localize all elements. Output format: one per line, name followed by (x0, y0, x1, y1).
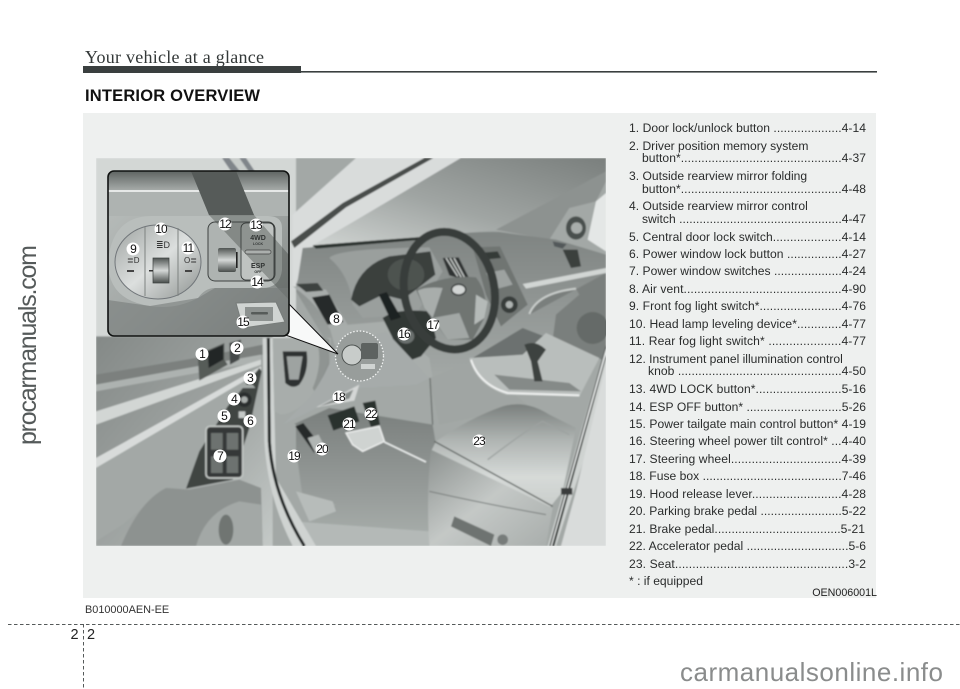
parts list: 9. Front fog light switch*........................4-76 (629, 299, 866, 313)
number callouts: 14 (251, 275, 264, 289)
number callouts: 2 (234, 341, 241, 355)
4WD LOCK and ESP OFF labels (250, 235, 266, 274)
center stack (473, 246, 528, 326)
column shroud (383, 310, 436, 366)
parts list: 15. Power tailgate main control button* 4-19 (629, 417, 866, 431)
number callouts: 7 (217, 449, 224, 463)
parts list: 2. Driver position memory system (629, 139, 808, 153)
dashboard (296, 232, 606, 345)
door handle recess (198, 343, 228, 381)
4WD LOCK and ESP OFF labels: 4WD (250, 235, 266, 242)
page numbers: 2 (87, 627, 95, 643)
inset: switch panel detail: ≣D (156, 240, 171, 250)
parts list: 5. Central door lock switch....................4-14 (629, 230, 866, 244)
header title: Your vehicle at a glance (85, 47, 264, 67)
watermark: procarmanuals.com: procarmanuals.com (14, 245, 42, 445)
inset: switch panel detail: ≣D (127, 256, 140, 265)
windshield (313, 158, 606, 245)
console (469, 333, 599, 396)
number callouts: 17 (427, 318, 440, 332)
armrest (121, 480, 263, 546)
window frame (293, 158, 461, 291)
parts list: 4. Outside rearview mirror control (629, 199, 808, 213)
number callouts: 13 (250, 218, 263, 232)
parts list: 1. Door lock/unlock button ....................4-14 (629, 121, 866, 135)
a-pillar and window (496, 171, 606, 240)
4WD LOCK and ESP OFF labels: OFF (254, 270, 262, 274)
tailgate button (236, 302, 285, 328)
number callouts: 10 (155, 222, 168, 236)
parts list: 10. Head lamp leveling device*.............4-77 (629, 317, 866, 331)
panel: interior overview background (83, 113, 876, 598)
parts list: 8. Air vent..............................................4-90 (629, 282, 866, 296)
parts list: 11. Rear fog light switch* .....................4-77 (629, 334, 866, 348)
number callouts: 12 (219, 217, 232, 231)
number callouts: 20 (316, 442, 329, 456)
instrument hood (330, 247, 442, 308)
parts list: 7. Power window switches ....................4-24 (629, 264, 866, 278)
number callouts (126, 217, 486, 463)
leader pointer (280, 304, 338, 354)
number callouts: 11 (183, 241, 195, 255)
page frame dashes (8, 624, 960, 689)
steering wheel hub (416, 277, 486, 340)
number callouts: 6 (247, 414, 254, 428)
parts list: 19. Hood release lever..........................4-28 (629, 487, 866, 501)
right dash (523, 268, 606, 289)
parts list: * : if equipped (629, 574, 703, 588)
door edge (263, 338, 316, 546)
side vent (283, 351, 307, 387)
number callouts: 4 (231, 392, 238, 406)
seat side (428, 450, 553, 546)
parts list (629, 121, 866, 588)
inset: switch panel detail: O≣ (184, 256, 197, 265)
dashed zoom circle (336, 331, 384, 381)
section heading: INTERIOR OVERVIEW (85, 87, 260, 105)
illustration: car interior (96, 158, 609, 546)
image code: OEN006001L (812, 587, 877, 599)
parts list: button*...............................................4-48 (642, 182, 866, 196)
number callouts: 21 (343, 417, 356, 431)
number callouts: 3 (247, 371, 254, 385)
inset: switch panel detail (108, 171, 289, 336)
reference code: B010000AEN-EE (85, 604, 169, 616)
page numbers (70, 627, 95, 643)
parts list: 23. Seat..................................................3-2 (629, 557, 866, 571)
4WD LOCK and ESP OFF labels: LOCK (253, 242, 263, 246)
lower fascia (330, 322, 430, 364)
parts list: 6. Power window lock button ................4-27 (629, 247, 866, 261)
number callouts: 1 (199, 347, 206, 361)
driver vent (293, 286, 348, 329)
parts list: button*...............................................4-37 (642, 151, 866, 165)
window switch panel (186, 368, 262, 489)
floor (294, 408, 436, 504)
seat cushion (431, 404, 576, 508)
number callouts: 22 (365, 407, 378, 421)
upper door frame (96, 158, 296, 345)
number callouts: 8 (333, 312, 340, 326)
parts list: 17. Steering wheel................................4-39 (629, 452, 866, 466)
right vent (553, 241, 567, 249)
parts list: 14. ESP OFF button* ............................5-26 (629, 400, 866, 414)
kick panel (292, 424, 297, 445)
parts list: 3. Outside rearview mirror folding (629, 169, 807, 183)
center vent (442, 256, 469, 278)
header rule (83, 66, 877, 73)
right door pillar (548, 345, 606, 546)
number callouts: 9 (130, 242, 137, 256)
below wheel shade (474, 328, 543, 358)
lower shading (108, 288, 289, 336)
parts list: switch ................................................4-47 (642, 212, 866, 226)
number callouts: 15 (237, 315, 250, 329)
left door panel (96, 336, 273, 546)
watermark: carmanualsonline.info: carmanualsonline.info (680, 657, 943, 687)
number callouts: 5 (221, 409, 228, 423)
parts list: 18. Fuse box .........................................7-46 (629, 469, 866, 483)
number callouts: 18 (333, 390, 346, 404)
parts list: 21. Brake pedal.....................................5-21 (629, 522, 865, 536)
number callouts: 16 (398, 327, 411, 341)
number callouts: 23 (473, 434, 486, 448)
parts list: knob ................................................4-50 (648, 364, 866, 378)
4WD LOCK and ESP OFF labels: ESP (251, 263, 265, 270)
a-pillar trim (272, 338, 331, 345)
steering wheel rim (400, 227, 500, 354)
page numbers: 2 (70, 627, 79, 643)
pedals (295, 422, 316, 454)
instrument cluster (351, 251, 435, 306)
parts list: 20. Parking brake pedal ........................5-22 (629, 504, 866, 518)
parts list: 12. Instrument panel illumination control (629, 352, 843, 366)
parts list: 22. Accelerator pedal ..............................5-6 (629, 539, 866, 553)
parts list: 16. Steering wheel power tilt control* ...4-40 (629, 434, 866, 448)
knee bolster (314, 338, 413, 394)
parts list: 13. 4WD LOCK button*.........................5-16 (629, 382, 866, 396)
number callouts: 19 (288, 449, 301, 463)
